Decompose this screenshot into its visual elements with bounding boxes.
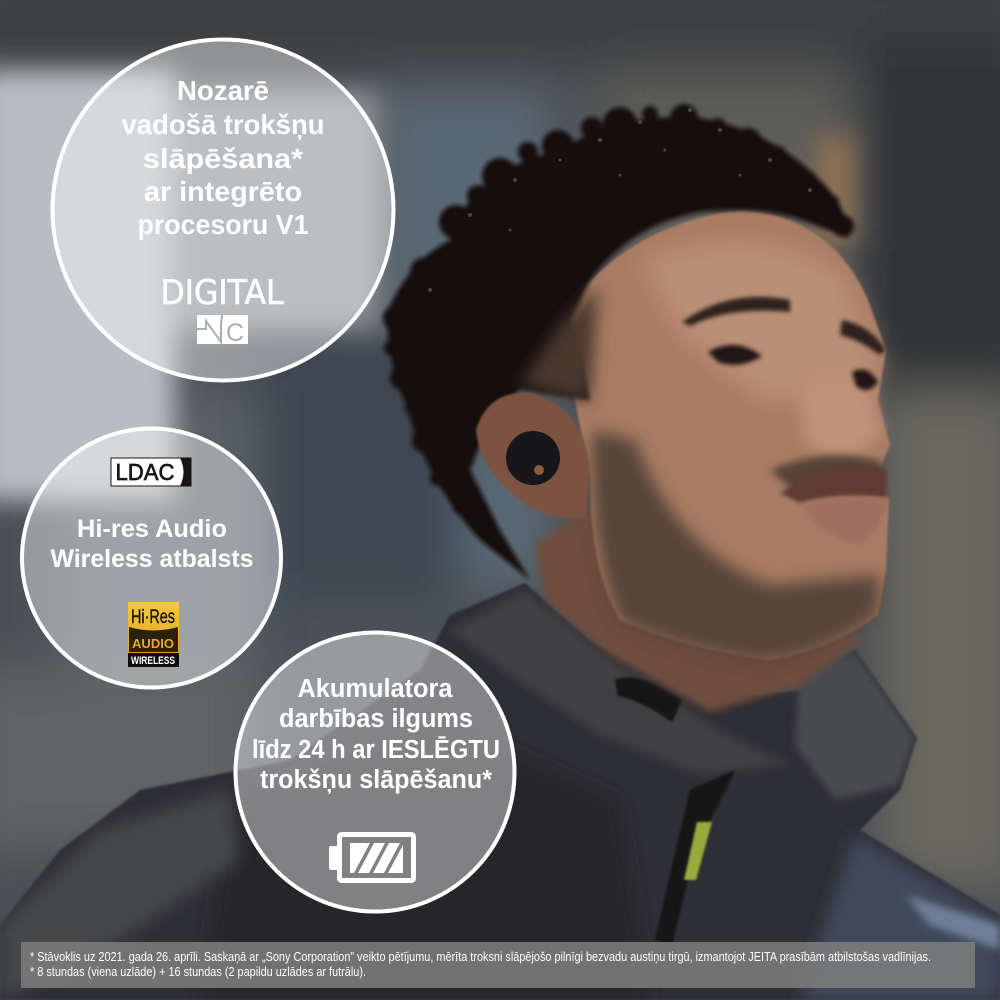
heading: hi-res audio wireless: Hi-res Audio [77, 515, 227, 543]
logo: Hi-Res Audio Wireless: WIRELESS [131, 655, 175, 667]
hair fade above ear [520, 285, 598, 402]
logo: NC icon: C [226, 319, 244, 347]
earbud [506, 431, 560, 485]
panel: hi-res audio badge [22, 428, 281, 688]
heading: hi-res audio wireless [50, 515, 254, 573]
logo: Hi-Res Audio Wireless [128, 602, 179, 667]
heading: battery life: darbības ilgums [279, 705, 473, 733]
hair [383, 104, 854, 580]
icon: battery [329, 834, 414, 880]
logo: Hi-Res Audio Wireless: Hi·Res [131, 607, 175, 628]
footnote bar [21, 942, 975, 988]
heading: battery life: Akumulatora [298, 675, 453, 703]
heading: battery life [252, 675, 500, 794]
heading: hi-res audio wireless: Wireless atbalsts [50, 545, 254, 573]
heading: noise cancelling: ar integrēto [144, 176, 302, 207]
logo: LDAC: LDAC [116, 459, 174, 485]
heading: noise cancelling: vadošā trokšņu [122, 109, 324, 140]
logo: digital noise cancelling wordmark: DIGITAL [160, 273, 284, 313]
hair highlights: wet curls [428, 108, 812, 292]
heading: battery life: līdz 24 h ar IESLĒGTU [252, 736, 500, 764]
neck [535, 500, 860, 712]
heading: noise cancelling: slāpēšana* [143, 143, 303, 174]
jacket [0, 583, 1000, 1000]
panel: noise cancelling badge [52, 40, 394, 380]
panel: battery life badge [236, 632, 514, 912]
heading: noise cancelling [122, 75, 324, 240]
heading: battery life: trokšņu slāpēšanu* [260, 766, 492, 794]
heading: noise cancelling: Nozarē [177, 75, 269, 106]
heading: noise cancelling: procesoru V1 [138, 209, 308, 240]
footnote text: * 8 stundas (viena uzlāde) + 16 stundas (2 papildu uzlādes ar futrālu). [30, 964, 366, 979]
footnote text [30, 949, 931, 979]
ear [476, 393, 590, 519]
logo: NC icon [197, 315, 248, 347]
face [560, 210, 890, 662]
logo: Hi-Res Audio Wireless: AUDIO [132, 637, 174, 651]
